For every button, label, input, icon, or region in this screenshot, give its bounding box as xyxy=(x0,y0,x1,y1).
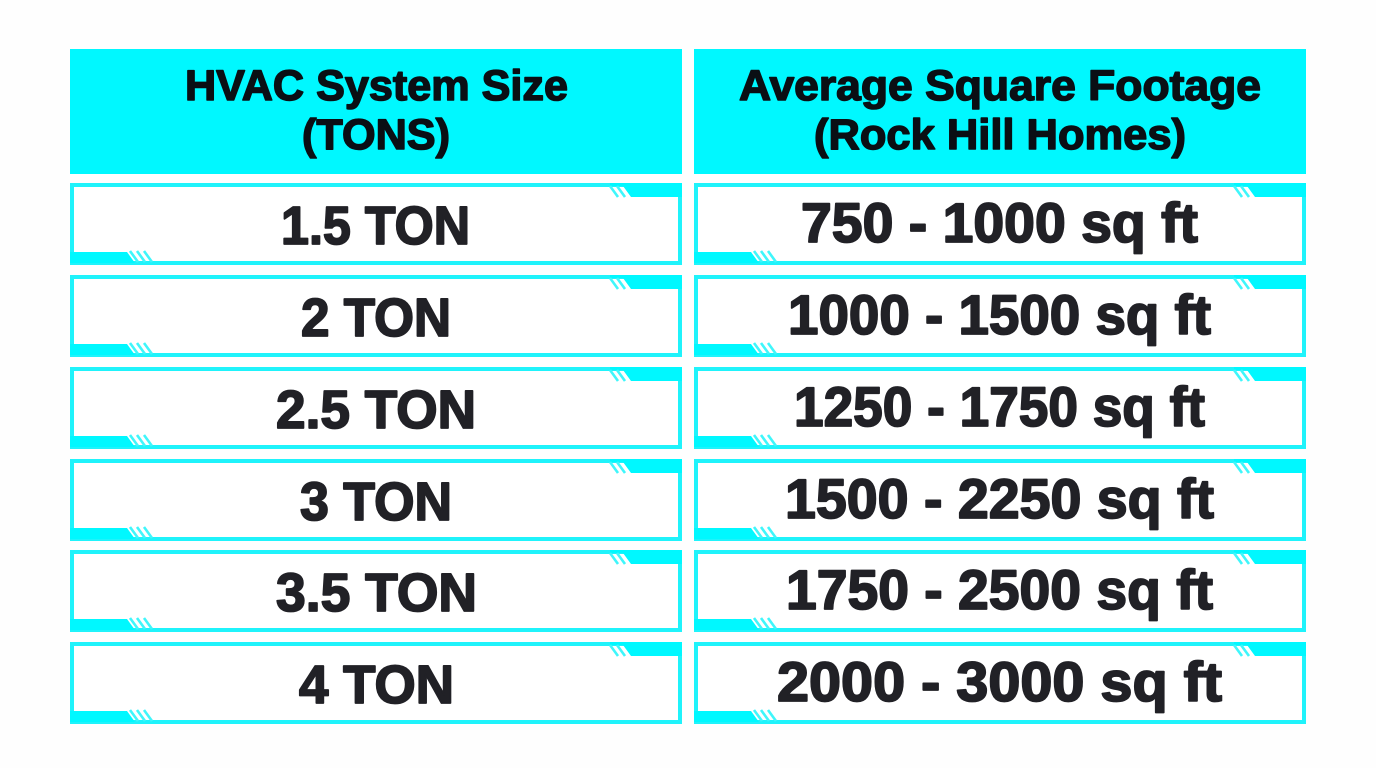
row 5 size: 3.5 TON xyxy=(276,563,477,623)
row 1 footage: 750 - 1000 sq ft xyxy=(801,191,1198,254)
row 4 footage: 1500 - 2250 sq ft xyxy=(785,467,1214,530)
row 3 size xyxy=(70,367,682,447)
row 6 size: 4 TON xyxy=(299,655,454,715)
row 1 size: 1.5 TON xyxy=(281,196,470,256)
row 6 footage xyxy=(694,642,1306,722)
header: HVAC System Size: HVAC System Size xyxy=(185,62,568,110)
row 4 size xyxy=(70,459,682,539)
row 4 footage xyxy=(694,459,1306,539)
row 3 size: 2.5 TON xyxy=(276,380,476,440)
row 2 footage xyxy=(694,275,1306,355)
header: HVAC System Size xyxy=(70,49,682,174)
row 5 footage: 1750 - 2500 sq ft xyxy=(786,558,1213,621)
row 2 size xyxy=(70,275,682,355)
row 2 size: 2 TON xyxy=(301,288,451,348)
row 6 footage: 2000 - 3000 sq ft xyxy=(777,650,1222,713)
row 5 footage xyxy=(694,550,1306,630)
table xyxy=(70,49,1306,722)
row 3 footage: 1250 - 1750 sq ft xyxy=(794,375,1205,438)
header: Average Square Footage xyxy=(694,49,1306,174)
row 6 size xyxy=(70,642,682,722)
row 1 footage xyxy=(694,183,1306,263)
header: Average Square Footage: (Rock Hill Homes) xyxy=(814,111,1186,159)
row 3 footage xyxy=(694,367,1306,447)
row 5 size xyxy=(70,550,682,630)
row 2 footage: 1000 - 1500 sq ft xyxy=(788,283,1211,346)
row 1 size xyxy=(70,183,682,263)
header: HVAC System Size: (TONS) xyxy=(302,111,450,159)
row 4 size: 3 TON xyxy=(300,472,452,532)
header: Average Square Footage: Average Square Footage xyxy=(739,62,1261,110)
